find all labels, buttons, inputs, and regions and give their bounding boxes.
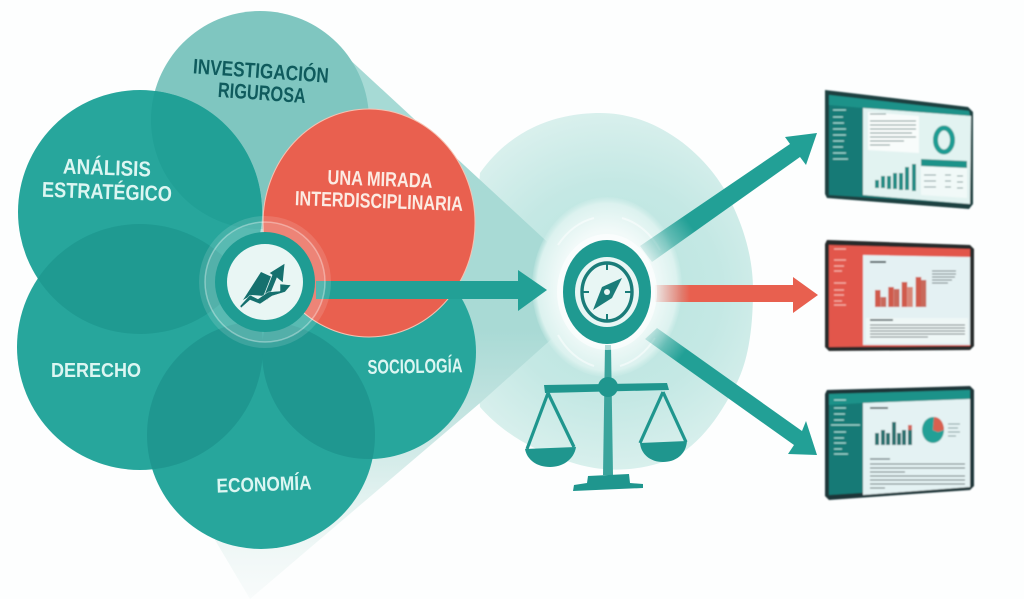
- bar chart: [875, 422, 912, 445]
- label: derecho: DERECHO: [51, 359, 141, 382]
- circle: economía: [147, 321, 375, 549]
- data table: [921, 159, 967, 198]
- text block: [866, 318, 968, 343]
- label: análisis estratégico: ESTRATÉGICO: [42, 177, 172, 206]
- donut chart: [936, 128, 952, 152]
- light cone between circles and compass: [215, 57, 556, 599]
- horizontal arrow to compass: [316, 270, 547, 311]
- glow rings around compass: [558, 218, 660, 366]
- icon: balance scale: [525, 345, 687, 491]
- label: una mirada interdisciplinaria: [295, 166, 463, 216]
- label: sociología: SOCIOLOGÍA: [367, 354, 463, 379]
- bar chart: [875, 164, 916, 191]
- circle: análisis estratégico: [18, 90, 262, 334]
- label: economía: ECONOMÍA: [216, 471, 312, 498]
- bar chart: [875, 277, 926, 307]
- label: una mirada interdisciplinaria: UNA MIRADA: [327, 166, 433, 193]
- pie chart: [922, 417, 944, 443]
- arrow to second dashboard: [655, 277, 818, 313]
- label: análisis estratégico: [42, 153, 172, 206]
- label: análisis estratégico: ANÁLISIS: [63, 153, 151, 182]
- overlap: investigación and análisis: [155, 91, 262, 229]
- overlap: derecho and economía: [147, 324, 262, 470]
- arrow down to third dashboard: [645, 328, 817, 455]
- side note lines: [932, 271, 956, 283]
- halo behind compass: [470, 113, 753, 470]
- label: investigación rigurosa: [192, 54, 330, 108]
- sidebar menu lines: [833, 110, 848, 159]
- icon: compass: [557, 234, 657, 350]
- dashboard two: red: [825, 240, 974, 351]
- dashboard three: teal: [825, 386, 974, 500]
- venn diagram of disciplines: [17, 11, 476, 549]
- dashboard one: teal: [825, 90, 973, 209]
- circle: una mirada interdisciplinaria: [263, 109, 475, 337]
- overlap: sociología and economía: [262, 325, 375, 459]
- label: investigación rigurosa: INVESTIGACIÓN: [192, 54, 330, 88]
- circle: investigación rigurosa: [151, 11, 369, 229]
- compass and scales: [525, 234, 687, 491]
- label: una mirada interdisciplinaria: INTERDISCIPLINARIA: [295, 187, 463, 216]
- arrow up to first dashboard: [640, 133, 817, 262]
- text block: [870, 458, 890, 460]
- circle: derecho: [17, 224, 263, 470]
- sidebar menu lines: [831, 400, 860, 454]
- icon: chart with rising arrow: [240, 263, 291, 308]
- overlap: análisis and derecho: [38, 224, 222, 334]
- legend: [948, 424, 960, 436]
- label: investigación rigurosa: RIGUROSA: [217, 79, 307, 108]
- sidebar menu lines: [834, 249, 846, 305]
- heading line: [870, 407, 888, 409]
- text panel: [868, 112, 919, 153]
- central analysis icon: [199, 216, 331, 348]
- inner glow around compass: [532, 197, 682, 377]
- circle: sociología: [262, 245, 476, 459]
- heading line: [870, 261, 886, 263]
